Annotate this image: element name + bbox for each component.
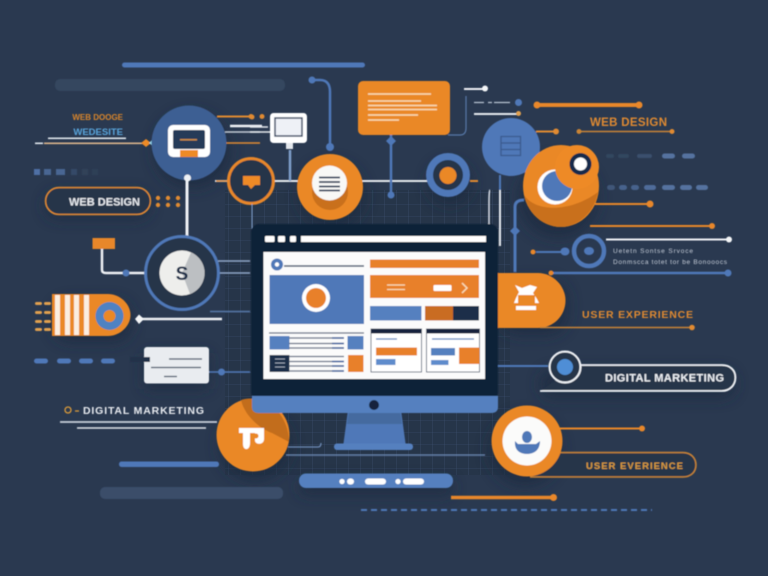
white note card [130, 347, 250, 384]
faint top bar [55, 79, 285, 91]
colour blocks [370, 306, 479, 320]
screen [264, 252, 485, 379]
stand [334, 410, 413, 450]
top-left labels [35, 113, 158, 147]
card one [371, 329, 422, 372]
right lines [590, 200, 732, 242]
blue dashes [34, 358, 115, 364]
list block [269, 333, 364, 372]
blue status pill [299, 474, 453, 488]
orange ring node [216, 158, 274, 232]
digital marketing pill: DIGITAL MARKETING [605, 372, 724, 384]
digital marketing label [60, 405, 217, 428]
ring with caption [530, 236, 728, 266]
connector lines [286, 443, 485, 455]
screen header [271, 258, 364, 270]
orange message box [358, 81, 450, 135]
user experience label [540, 309, 695, 330]
digital marketing label: DIGITAL MARKETING [83, 405, 204, 417]
orange tab with icon [498, 273, 566, 328]
web design pill [46, 188, 180, 214]
card two [426, 329, 480, 372]
orange thick line [534, 102, 642, 108]
ring with caption: Uetetn Sontse Srvoce [613, 248, 693, 255]
digital marketing pill [498, 352, 736, 391]
top bar [122, 62, 365, 68]
orange banners [370, 260, 479, 298]
user experience pill: USER EVERIENCE [586, 461, 683, 472]
node connectors [187, 80, 500, 246]
orange thin line [576, 129, 674, 134]
S node [92, 236, 250, 310]
orange striped tag [35, 294, 130, 336]
orange list node [297, 154, 363, 220]
blue long line [548, 270, 732, 276]
fading squares [34, 169, 98, 175]
bezel [251, 224, 498, 400]
hero image [270, 275, 364, 324]
white monitor icon [250, 113, 307, 149]
user experience pill [492, 406, 696, 477]
fading dashes [606, 154, 708, 190]
bottom right lines [361, 494, 652, 510]
window controls [265, 236, 486, 242]
blue list node [482, 118, 559, 176]
ring with caption: Donmscca totet tor be Bonooocs [613, 259, 728, 266]
ring node [426, 153, 470, 197]
faint bottom bar [100, 487, 283, 499]
heading web design: WEB DESIGN [590, 117, 667, 129]
top-right small lines [464, 86, 522, 116]
orange blob node [510, 145, 599, 272]
S node: S [176, 264, 188, 285]
blue node: monitor [152, 106, 226, 182]
user experience label: USER EXPERIENCE [582, 309, 693, 321]
orange cart node [216, 398, 290, 472]
bottom left bar [119, 462, 219, 467]
top-left labels: WEB DOOGE [72, 113, 124, 122]
chin [252, 396, 498, 413]
top-left labels: WEDESITE [73, 127, 123, 138]
monitor [251, 224, 498, 450]
web design pill: WEB DESIGN [69, 196, 140, 208]
white connector [135, 312, 250, 324]
